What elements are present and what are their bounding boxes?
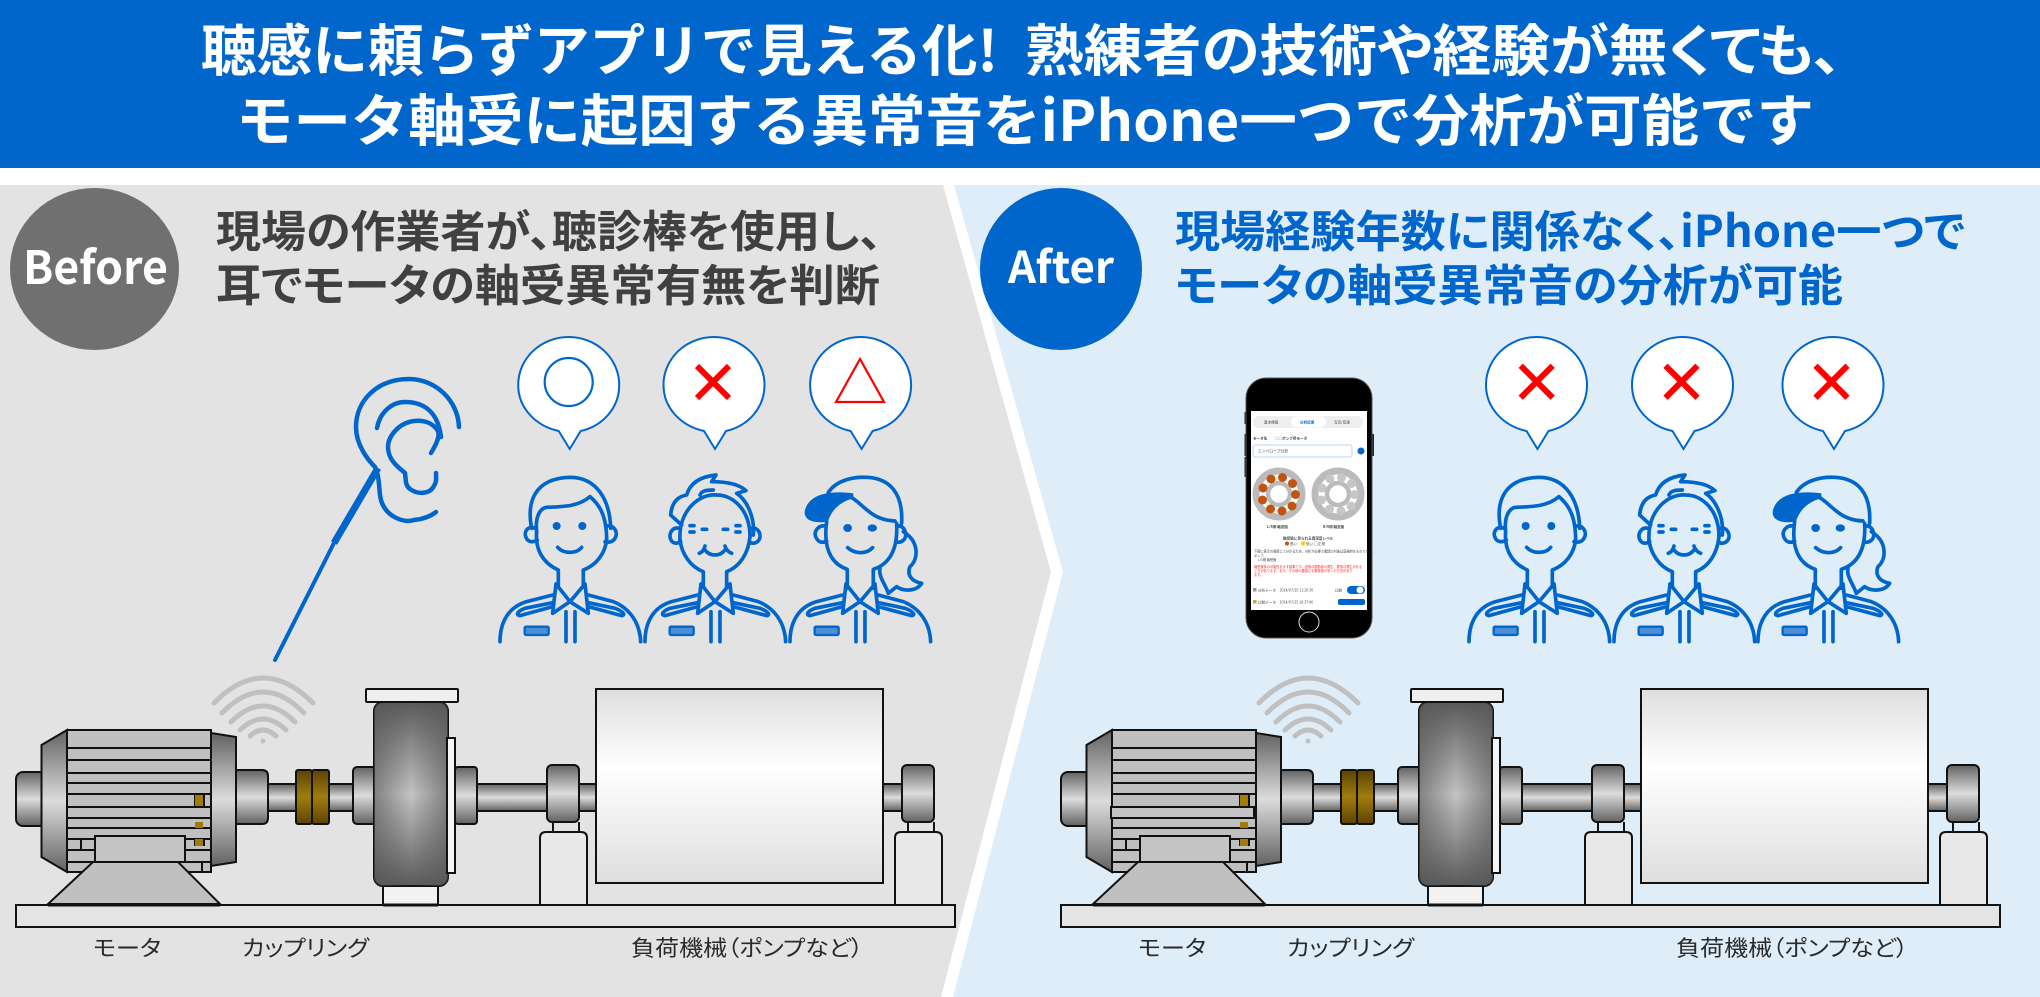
phone app mockup: L/S側 軸受箇 [1267, 524, 1288, 530]
header line 1 start: 聴感に頼らずアプリで見える化! [201, 7, 998, 88]
phone app mockup: ポンプ。 [1254, 553, 1267, 558]
phone app mockup: 軸受異常の可能性を示す結果です。過度の振動音の発生、異常の発生がある [1254, 564, 1362, 569]
balloon: after cross 3 [1782, 337, 1884, 449]
phone app mockup: 分析結果 [1300, 420, 1315, 426]
balloon: circle answer [518, 337, 619, 449]
machine before [16, 689, 955, 927]
phone app mockup: ○○ポンプ用モータ [1275, 436, 1308, 442]
worker: older man [645, 475, 786, 642]
phone app mockup: R/S側 軸受箇 [1323, 524, 1345, 530]
balloon: after cross 2 [1632, 337, 1733, 449]
header line 1 end: 熟練者の技術や経験が無くても、 [1025, 7, 1842, 88]
phone app mockup: 比較データ 2024/07/25 10:37:06 [1258, 600, 1313, 606]
machine labels before: 負荷機械（ポンプなど） [631, 931, 863, 963]
before heading: 現場の作業者が、聴診棒を使用し、 [216, 196, 882, 260]
worker: young man [500, 477, 641, 642]
panel: after [953, 185, 2040, 997]
phone app mockup: 比較 [1335, 588, 1343, 594]
machine after [1061, 689, 2000, 927]
after heading: 現場経験年数に関係なく、iPhone一つで [1175, 196, 1965, 260]
machine labels after [1138, 931, 1908, 963]
before badge [10, 188, 179, 350]
bearing right [1315, 471, 1361, 517]
after badge: After [1007, 232, 1115, 296]
after badge [980, 188, 1142, 350]
phone app mockup: 下図に表示の軸受にて分かるため、分析が必要で確認の対象は直線的なものです。 [1254, 548, 1372, 554]
bearing left [1256, 471, 1302, 517]
after heading [1175, 196, 1965, 314]
phone app mockup: 軸受箇に見られる異常度レベル [1283, 536, 1334, 542]
icon: sound waves after [1259, 678, 1358, 744]
phone app mockup: 正常 [1318, 541, 1326, 547]
worker after: woman with cap [1758, 477, 1899, 642]
worker: woman with cap [790, 477, 931, 642]
icon: ear with stethoscope [275, 379, 459, 660]
machine labels before: カップリング [242, 931, 371, 963]
phone app mockup: 分析データ 2024/07/25 11:20:30 [1258, 588, 1313, 594]
machine labels after: カップリング [1287, 931, 1416, 963]
before heading [216, 196, 882, 314]
before badge: Before [23, 232, 168, 298]
phone app mockup: 高い [1290, 541, 1298, 547]
machine labels after: モータ [1138, 931, 1206, 963]
worker after: young man [1469, 477, 1610, 642]
balloon: cross answer [664, 337, 764, 449]
balloon: after cross 1 [1486, 337, 1587, 449]
phone app mockup: 基本情報 [1264, 420, 1279, 426]
panel: before [0, 185, 1051, 997]
machine labels after: 負荷機械（ポンプなど） [1676, 931, 1908, 963]
header banner [0, 0, 2040, 168]
header line 2: モータ軸受に起因する異常音をiPhone一つで分析が可能です [236, 77, 1814, 158]
after heading: モータの軸受異常音の分析が可能 [1175, 250, 1843, 314]
icon: sound waves before [214, 678, 313, 744]
worker after: older man [1614, 475, 1755, 642]
phone app mockup: モータ名 [1253, 436, 1268, 442]
machine labels before: モータ [93, 931, 161, 963]
phone app mockup: 写真/音源 [1334, 420, 1350, 426]
phone app mockup: L/S側 軸受箇 [1258, 557, 1277, 562]
balloon: triangle answer [810, 337, 911, 449]
machine labels before [93, 931, 863, 963]
phone app mockup: ときがあります。また、その他の要因にも異常音が多くの方法があり [1254, 568, 1352, 573]
phone app mockup: エンベロープ分析 [1258, 448, 1288, 454]
phone app mockup: ます。 [1254, 572, 1263, 577]
phone app mockup: 低い [1306, 541, 1314, 547]
before heading: 耳でモータの軸受異常有無を判断 [216, 250, 880, 314]
phone app mockup [1244, 378, 1374, 638]
